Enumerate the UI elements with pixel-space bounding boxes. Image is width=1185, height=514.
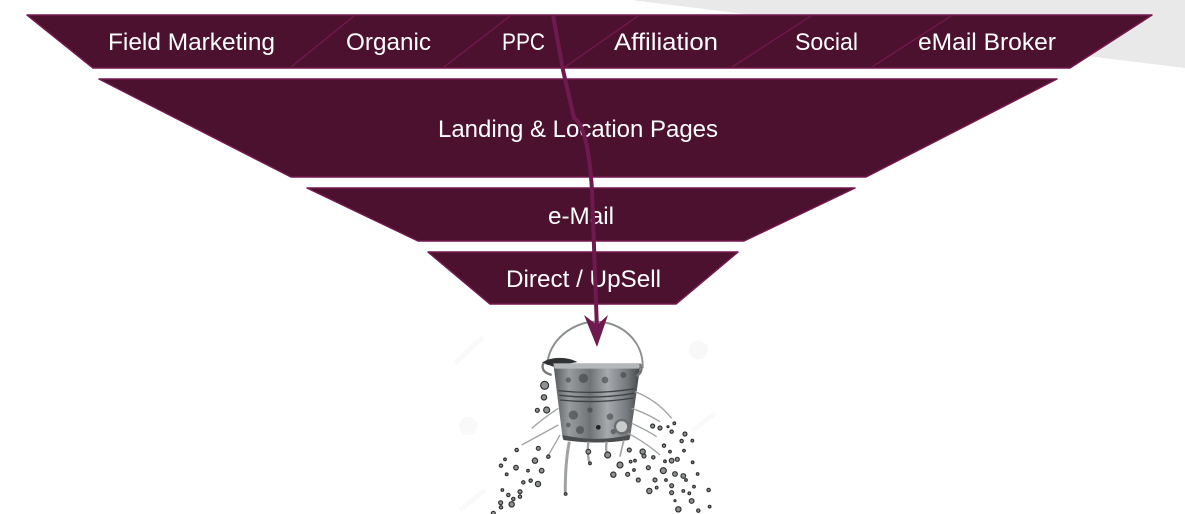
label: Social: Social (795, 29, 858, 56)
label: Organic: Organic (346, 29, 431, 56)
icon: leaking bucket (455, 322, 715, 514)
funnel tier 3: e-Mail (307, 188, 855, 241)
funnel tier 2: landing and location pages (99, 79, 1057, 177)
funnel tier 1: traffic channels (27, 15, 1152, 68)
funnel tier 4: Direct / UpSell (428, 252, 738, 304)
arrow: flow through funnel into bucket (553, 15, 608, 347)
label: eMail Broker: eMail Broker (918, 29, 1056, 56)
label: e-Mail: e-Mail (548, 203, 614, 230)
background grey wedge (631, 0, 1185, 68)
label: Direct / UpSell: Direct / UpSell (506, 266, 661, 293)
label: PPC: PPC (502, 29, 545, 56)
label: Affiliation: Affiliation (614, 29, 718, 56)
label: Field Marketing: Field Marketing (108, 29, 275, 56)
label: Landing and Location Pages: Landing & Location Pages (438, 116, 718, 143)
